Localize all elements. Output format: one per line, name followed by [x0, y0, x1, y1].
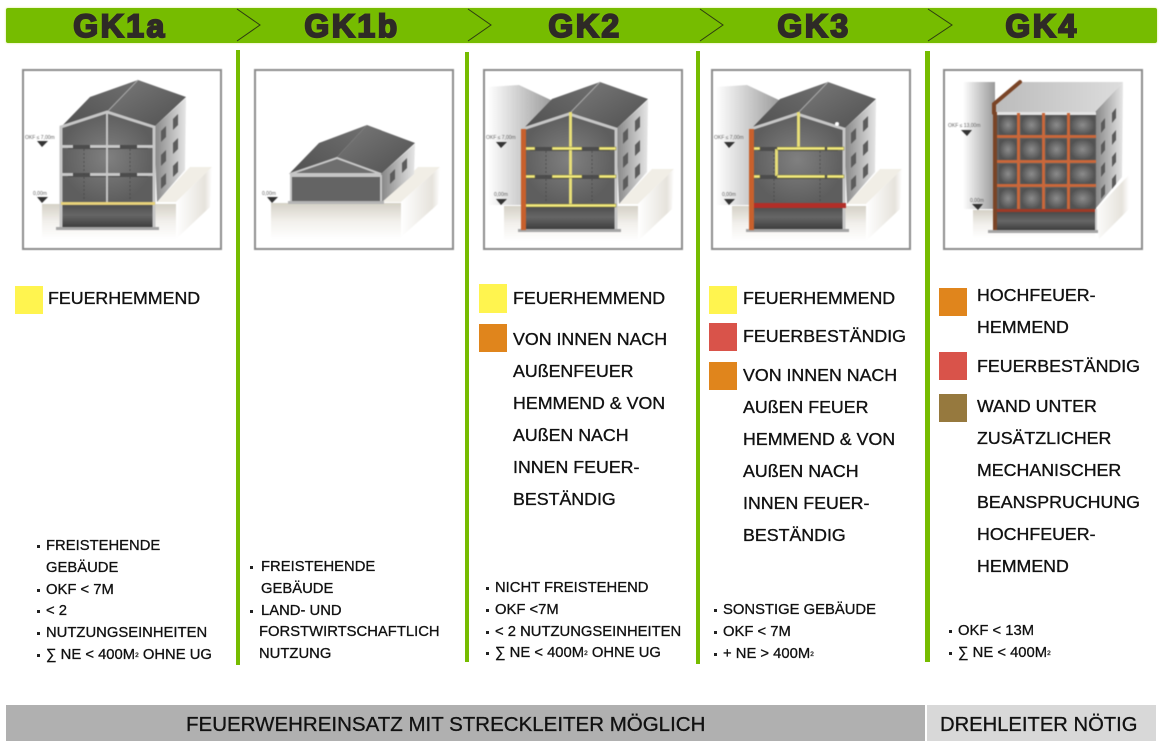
criteria list GK1a: < 2: [46, 603, 67, 619]
legend label: AUßEN NACH: [743, 461, 859, 481]
panel: GK3: [709, 68, 912, 662]
criteria list GK1a: FREISTEHENDE: [46, 538, 160, 554]
building illustration GK1a: [21, 68, 223, 251]
criteria list GK4: OKF < 13M: [958, 623, 1034, 639]
legend label: [742, 365, 897, 545]
heading: GK1b: GK1b: [304, 8, 400, 44]
building illustration GK3: 0,00m: [722, 192, 736, 198]
panel: GK1b: [250, 68, 455, 662]
legend swatch: yellow: [709, 286, 737, 314]
legend label: WAND UNTER: [977, 396, 1097, 416]
criteria list GK1a: NUTZUNGSEINHEITEN: [46, 625, 207, 641]
criteria list GK2: [486, 580, 681, 661]
panel: GK4: [939, 68, 1144, 661]
criteria list GK1b: FREISTEHENDE: [261, 559, 375, 575]
legend label: AUßEN NACH: [513, 425, 629, 445]
legend swatch: yellow: [479, 284, 507, 313]
legend label: VON INNEN NACH: [513, 329, 667, 349]
legend label: FEUERHEMMEND: [513, 288, 665, 308]
legend swatch: yellow: [15, 286, 43, 314]
criteria list GK4: ∑ NE < 400M2: [958, 645, 1051, 661]
building illustration GK1a: 0,00m: [33, 191, 47, 197]
chevron arrows: [236, 8, 953, 42]
criteria list GK4: [949, 623, 1051, 661]
building illustration GK2: 0,00m: [494, 192, 508, 198]
building illustration GK1a: OKF ≤ 7,00m: [25, 135, 55, 141]
panel: GK1a: [15, 68, 223, 663]
criteria list GK3: + NE > 400M2: [723, 646, 814, 662]
legend label: INNEN FEUER-: [743, 493, 869, 513]
legend label: FEUERBESTÄNDIG: [977, 356, 1140, 376]
legend label: AUßENFEUER: [513, 361, 634, 381]
legend label: HOCHFEUER-: [977, 524, 1096, 544]
divider 2: [465, 52, 469, 662]
legend label: [977, 285, 1096, 337]
criteria list GK2: ∑ NE < 400M2 OHNE UG: [495, 645, 661, 661]
criteria list GK2: < 2 NUTZUNGSEINHEITEN: [495, 624, 681, 640]
building illustration GK3: OKF ≤ 7,00m: [714, 135, 744, 141]
legend label: [976, 396, 1140, 576]
legend label: AUßEN FEUER: [743, 397, 868, 417]
footer bar: Drehleiter: [927, 705, 1156, 741]
building illustration GK1b: [253, 68, 455, 251]
building illustration GK3: [710, 68, 912, 251]
criteria list GK3: OKF < 7M: [723, 624, 791, 640]
criteria list GK3: SONSTIGE GEBÄUDE: [723, 602, 876, 618]
footer bar: Streckleiter: FEUERWEHREINSATZ MIT STRECKLEITER MÖGLICH: [186, 713, 705, 736]
divider 1: [236, 50, 240, 665]
criteria list GK1b: FORSTWIRTSCHAFTLICH: [259, 624, 440, 640]
building illustration GK4: OKF ≤ 13,00m: [948, 123, 980, 129]
legend label: MECHANISCHER: [977, 460, 1121, 480]
heading: GK2: GK2: [548, 8, 622, 44]
legend label: INNEN FEUER-: [513, 457, 639, 477]
footer bar: Streckleiter: [6, 705, 925, 741]
legend label: HEMMEND: [977, 317, 1069, 337]
divider 3: [696, 51, 700, 664]
heading: GK4: GK4: [1005, 8, 1079, 44]
criteria list GK1a: OKF < 7M: [46, 582, 114, 598]
legend label: FEUERBESTÄNDIG: [743, 326, 906, 346]
footer bar: Drehleiter: DREHLEITER NÖTIG: [940, 714, 1137, 736]
legend swatch: red: [939, 352, 967, 380]
legend label: [512, 329, 667, 509]
building illustration GK1b: 0,00m: [262, 191, 276, 197]
legend label: BESTÄNDIG: [743, 525, 846, 545]
criteria list GK1b: LAND- UND: [261, 602, 342, 618]
legend label: FEUERHEMMEND: [48, 288, 200, 308]
legend label: VON INNEN NACH: [743, 365, 897, 385]
criteria list GK1b: NUTZUNG: [259, 646, 331, 662]
building illustration GK4: [942, 68, 1144, 251]
legend label: HOCHFEUER-: [977, 285, 1096, 305]
header band: [6, 8, 1157, 43]
legend swatch: orange: [479, 324, 507, 352]
legend label: HEMMEND & VON: [513, 393, 665, 413]
criteria list GK3: [714, 601, 876, 662]
criteria list GK1a: ∑ NE < 400M2 OHNE UG: [46, 647, 212, 663]
heading: GK3: GK3: [777, 8, 851, 44]
heading: GK1a: GK1a: [73, 8, 167, 44]
criteria list GK1a: GEBÄUDE: [46, 560, 118, 576]
legend swatch: orange: [939, 288, 967, 316]
panel: GK2: [479, 68, 684, 661]
legend swatch: brown: [939, 394, 967, 422]
divider 4: [925, 51, 930, 662]
criteria list GK1b: GEBÄUDE: [261, 581, 333, 597]
legend label: FEUERHEMMEND: [743, 288, 895, 308]
legend label: HEMMEND & VON: [743, 429, 895, 449]
legend label: BEANSPRUCHUNG: [977, 492, 1140, 512]
building illustration GK2: OKF ≤ 7,00m: [486, 135, 516, 141]
legend swatch: orange: [709, 362, 737, 390]
legend label: BESTÄNDIG: [513, 489, 616, 509]
legend swatch: red: [709, 323, 737, 351]
legend label: HEMMEND: [977, 556, 1069, 576]
legend label: ZUSÄTZLICHER: [977, 428, 1111, 448]
criteria list GK2: OKF <7M: [495, 602, 559, 618]
building illustration GK2: [482, 68, 684, 251]
criteria list GK2: NICHT FREISTEHEND: [495, 580, 648, 596]
criteria list GK1b: [250, 559, 440, 662]
building illustration GK4: 0,00m: [970, 198, 984, 204]
criteria list GK1a: [37, 538, 212, 663]
